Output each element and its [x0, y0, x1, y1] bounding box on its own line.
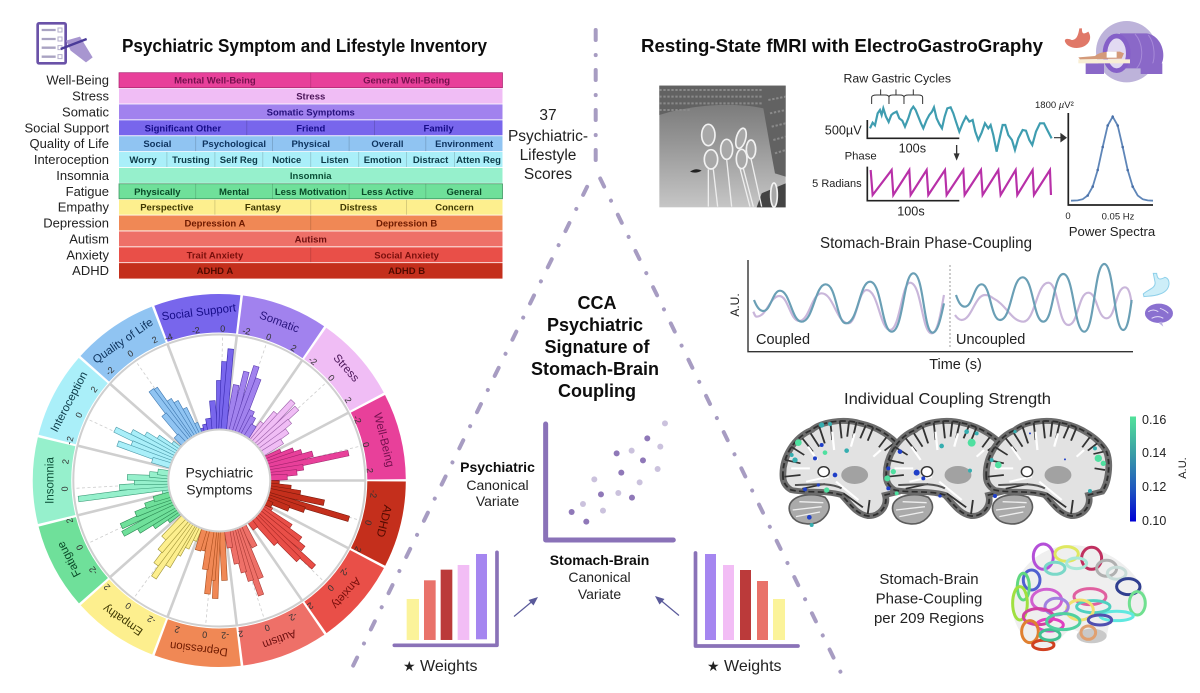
row: Empathy [58, 200, 502, 215]
chart: phase sawtooth: 100s [897, 205, 925, 219]
row: Well-Being: General Well-Being [363, 76, 450, 87]
chart: coupled and uncoupled signals [728, 260, 1133, 373]
heading: individual coupling strength: Individual Coupling Strength [844, 391, 1051, 408]
row: Anxiety: Social Anxiety [374, 250, 440, 261]
bar chart: psychiatric weights [394, 552, 497, 645]
row: Quality of Life: Quality of Life [30, 136, 109, 151]
chart: power spectra: Power Spectra [1069, 224, 1156, 239]
bars: Stress [247, 400, 299, 456]
text: stomach-brain phase-coupling per 209 regions: Phase-Coupling [876, 590, 982, 608]
sector labels: Fatigue [55, 539, 84, 579]
arrow: left weights to variate [514, 597, 538, 616]
row: Somatic: Somatic Symptoms [267, 107, 355, 118]
tick labels: 2 [343, 395, 354, 405]
sector labels: Anxiety [329, 574, 363, 611]
icon: stomach and MRI scanner [1065, 21, 1163, 82]
row: Quality of Life: Physical [291, 139, 330, 150]
text: 37 psychiatric-lifestyle scores: Scores [524, 166, 572, 183]
row: Stress: Stress [296, 92, 325, 103]
icon: checklist and hand [38, 23, 93, 63]
tick labels: 0 [360, 441, 371, 448]
row: Anxiety: Trait Anxiety [187, 250, 244, 261]
bars: Interoception [114, 427, 182, 469]
sector labels: ADHD [374, 504, 393, 538]
axes [748, 260, 1133, 352]
row: Empathy: Perspective [140, 203, 194, 214]
y-axis label: psychiatric canonical variate [460, 459, 535, 509]
tick labels: 0 [265, 331, 273, 342]
heading: CCA psychiatric signature: Coupling [558, 381, 636, 401]
sector labels: Depression [169, 639, 228, 658]
row: Social Support: Family [424, 123, 454, 134]
row: ADHD: ADHD B [388, 266, 425, 277]
bars: Social Support [201, 349, 234, 434]
heading: CCA psychiatric signature: Stomach-Brain [531, 359, 659, 379]
row: Interoception: Trusting [172, 155, 210, 166]
sector labels: Somatic [258, 310, 301, 336]
text: 37 psychiatric-lifestyle scores: Psychiatric- [508, 128, 588, 145]
tick labels: 0 [325, 583, 336, 593]
chart: raw gastric cycles: 500µV [825, 124, 862, 138]
photo: abdomen with electrodes [659, 86, 786, 207]
tick labels: 2 [305, 600, 315, 611]
y-axis label: psychiatric canonical variate: Canonical [466, 477, 529, 493]
sector labels: Interoception [49, 370, 90, 434]
icon: small stomach and brain [1143, 273, 1173, 327]
tick labels: 2 [60, 459, 71, 465]
tick labels: -4 [163, 331, 174, 343]
sector labels: Empathy [101, 602, 145, 637]
row: Autism: Autism [69, 231, 109, 246]
sector labels: Social Support [161, 302, 238, 323]
y-axis label: psychiatric canonical variate: Psychiatric [460, 459, 535, 475]
row: Interoception: Self Reg [220, 155, 258, 166]
chart: power spectra: 0 [1065, 211, 1071, 222]
sector labels: Stress [330, 352, 361, 385]
x-axis label: Time (s) [929, 357, 982, 373]
row: Interoception [34, 152, 502, 167]
row: Well-Being [46, 73, 502, 88]
left triangle dash-dot line [352, 187, 587, 668]
tick labels: -2 [351, 414, 364, 425]
chart: raw gastric cycles: Phase [845, 150, 877, 162]
row: Anxiety: Anxiety [66, 247, 109, 262]
tick labels: -2 [87, 564, 100, 577]
tick labels: 0 [220, 324, 225, 334]
zero reference lines [74, 335, 361, 626]
row: Somatic: Somatic [62, 104, 109, 119]
tick labels: 2 [150, 334, 159, 345]
tick labels: -2 [64, 435, 76, 446]
bars: Anxiety [247, 503, 316, 569]
row: Quality of Life: Social [143, 139, 171, 150]
label ring [0, 244, 455, 693]
row: Empathy: Concern [435, 203, 474, 214]
inventory table [24, 73, 502, 279]
tick labels: -2 [287, 610, 299, 623]
brain 3 [986, 421, 1109, 524]
row: Fatigue: General [446, 187, 482, 198]
tick labels: -2 [103, 365, 116, 377]
row: Interoception: Worry [129, 155, 157, 166]
tick labels: 0 [363, 519, 374, 526]
row: Depression [43, 216, 502, 230]
row: Somatic [62, 104, 502, 119]
text: stomach-brain phase-coupling per 209 regions: Stomach-Brain [879, 571, 979, 588]
bars: Autism [224, 523, 264, 596]
tick labels: 0 [326, 373, 337, 383]
x-axis label: stomach-brain canonical variate: Variate [578, 586, 621, 602]
text: stomach-brain phase-coupling per 209 regions: per 209 Regions [874, 610, 984, 627]
plot background [73, 334, 365, 626]
colorbar: 0.16 [1142, 413, 1166, 427]
tick labels: -2 [368, 490, 379, 498]
text: weights left: ★ Weights [403, 658, 478, 675]
chart: raw gastric cycles [825, 71, 1052, 162]
row: ADHD: ADHD [72, 263, 109, 278]
bars: Well-Being [263, 448, 349, 481]
row: Insomnia: Insomnia [290, 171, 332, 182]
row: Fatigue: Mental [219, 187, 249, 198]
row: Fatigue: Less Motivation [275, 187, 347, 198]
row: Social Support: Friend [296, 123, 325, 134]
sector labels: Insomnia [44, 457, 56, 504]
chart: power spectra: 1800 µV² [1035, 100, 1074, 111]
heading: stomach-brain phase-coupling: Stomach-Brain Phase-Coupling [820, 235, 1032, 252]
row: Empathy: Empathy [58, 200, 109, 215]
tick labels: 2 [102, 582, 112, 592]
row: ADHD: ADHD A [197, 266, 233, 277]
row: Autism: Autism [295, 234, 327, 245]
y-axis label: psychiatric canonical variate: Variate [476, 493, 519, 509]
bars: Depression [195, 527, 227, 599]
row: Stress: Stress [72, 89, 109, 104]
bars: Somatic [225, 366, 261, 440]
tick labels: 0 [263, 622, 271, 633]
tick labels: -2 [191, 325, 201, 336]
row: Quality of Life: Environment [435, 139, 494, 150]
hub: Psychiatric Symptoms [168, 430, 270, 532]
row: ADHD [72, 263, 502, 279]
tick labels: -2 [242, 325, 251, 337]
row: Insomnia [56, 168, 502, 183]
sector labels: Autism [261, 627, 298, 650]
bar chart: stomach-brain weights [696, 553, 798, 646]
x-axis label: stomach-brain canonical variate: Stomach-Brain [550, 552, 649, 568]
heading: CCA psychiatric signature [531, 293, 659, 401]
row: Social Support: Significant Other [145, 123, 221, 134]
heading: CCA psychiatric signature: Signature of [544, 337, 651, 357]
tick labels: -2 [338, 565, 351, 577]
text: 37 psychiatric-lifestyle scores: 37 [539, 107, 557, 124]
row: Well-Being: Mental Well-Being [174, 76, 256, 87]
row: Interoception: Distract [413, 155, 449, 166]
colorbar: 0.12 [1142, 480, 1166, 494]
row: Quality of Life [30, 136, 502, 151]
label: uncoupled: Uncoupled [956, 332, 1025, 348]
row: Fatigue: Physically [134, 187, 181, 198]
text: 37 psychiatric-lifestyle scores [508, 107, 588, 183]
brain atlas: 209 regions [1012, 544, 1147, 650]
chart: power spectra [1035, 100, 1156, 239]
bars: Insomnia [78, 469, 171, 502]
row: Depression: Depression A [184, 218, 245, 230]
row: Depression: Depression B [376, 218, 437, 230]
tick labels: 2 [365, 468, 375, 473]
bars: Quality of Life [149, 387, 202, 446]
row: Stress [72, 89, 502, 104]
chart: phase sawtooth [812, 167, 1051, 219]
bars: Empathy [152, 515, 202, 579]
sector labels: Well-Being [371, 412, 396, 468]
chart: raw gastric cycles: 100s [899, 142, 926, 156]
heading: CCA psychiatric signature: CCA [578, 293, 616, 313]
colorbar: 0.14 [1142, 446, 1166, 460]
tick labels: 0 [126, 348, 135, 359]
row: Insomnia: Insomnia [56, 168, 110, 183]
row: Well-Being: Well-Being [46, 73, 109, 88]
row: Autism [69, 231, 502, 246]
tick labels: 0 [60, 486, 70, 492]
row: Interoception: Notice [272, 155, 301, 166]
brain 1 [783, 421, 905, 527]
arrow: right weights to variate [655, 596, 679, 616]
row: Empathy: Fantasy [245, 203, 281, 214]
row: Interoception: Atten Reg [456, 155, 501, 166]
brain maps: individual coupling strength [783, 421, 1109, 527]
hub: Psychiatric Symptoms: Psychiatric [185, 464, 253, 480]
row: Interoception: Interoception [34, 152, 109, 167]
tick labels [60, 324, 379, 640]
text: 37 psychiatric-lifestyle scores: Lifestyle [520, 147, 576, 164]
heading: CCA psychiatric signature: Psychiatric [547, 315, 643, 335]
tick labels: -2 [221, 630, 229, 640]
row: Fatigue: Fatigue [66, 184, 109, 199]
row: Quality of Life: Psychological [202, 139, 266, 150]
tick labels: -2 [146, 613, 157, 626]
circular bar chart: psychiatric symptoms [0, 244, 455, 693]
tick labels: 2 [89, 385, 100, 394]
row: Quality of Life: Overall [371, 139, 404, 150]
chart: raw gastric cycles: Raw Gastric Cycles [844, 71, 951, 85]
row: Interoception: Listen [321, 155, 349, 166]
sector labels [44, 302, 396, 658]
x-axis label: stomach-brain canonical variate: Canonical [568, 569, 631, 585]
vertical dash-dot divider [594, 30, 598, 174]
x-axis label: stomach-brain canonical variate [550, 552, 649, 602]
text: stomach-brain phase-coupling per 209 regions [874, 571, 984, 627]
colorbar: A.U. [1177, 457, 1189, 479]
row: Fatigue [66, 184, 502, 199]
tick labels: 2 [352, 545, 364, 554]
chart: phase sawtooth: 5 Radians [812, 178, 862, 190]
row: Depression: Depression [43, 216, 109, 230]
bars: Fatigue [120, 492, 182, 536]
tick labels: 2 [64, 517, 75, 524]
row: Social Support [24, 120, 502, 135]
tick labels: 0 [123, 600, 133, 611]
chart: power spectra: 0.05 Hz [1102, 212, 1135, 222]
row: Empathy: Distress [340, 203, 377, 214]
brain 2 [884, 421, 1009, 524]
tick labels: 0 [74, 543, 85, 552]
colorbar: 0.10 [1142, 514, 1166, 528]
heading: inventory: Psychiatric Symptom and Lifestyle Inventory [122, 36, 487, 56]
right triangle dash-dot line [600, 178, 842, 675]
bars: ADHD [263, 480, 350, 522]
sector spokes [78, 336, 365, 625]
row: Anxiety [66, 247, 502, 262]
text: weights right: ★ Weights [707, 658, 782, 675]
sector labels: Quality of Life [91, 317, 156, 366]
y-axis label: A.U. [728, 293, 742, 317]
label: coupled: Coupled [756, 332, 810, 348]
tick labels: 2 [238, 629, 244, 639]
tick labels: 2 [173, 624, 181, 635]
row: Interoception: Emotion [364, 155, 402, 166]
row: Social Support: Social Support [24, 120, 109, 135]
heading: resting-state fMRI: Resting-State fMRI with ElectroGastroGraphy [641, 36, 1043, 56]
colorbar [1130, 413, 1189, 528]
row: Fatigue: Less Active [361, 187, 414, 198]
tick labels: 2 [289, 342, 298, 354]
tick labels: -2 [307, 354, 319, 367]
hub: Psychiatric Symptoms: Symptoms [186, 482, 252, 498]
scatter plot: canonical variates [546, 420, 673, 540]
tick labels: 0 [73, 411, 85, 419]
tick labels: 0 [202, 629, 208, 640]
